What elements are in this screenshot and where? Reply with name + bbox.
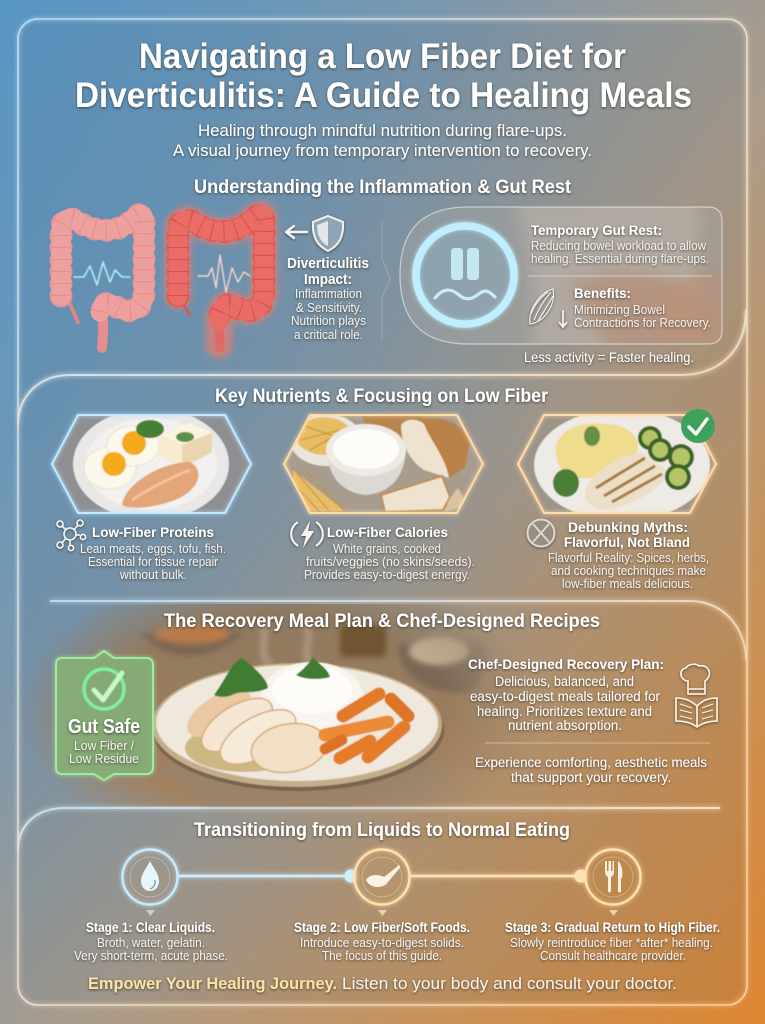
text: experience comforting: Experience comforting, aesthetic meals [475, 755, 707, 770]
copy: debunking: Debunking Myths: [568, 519, 688, 535]
text: less activity: Less activity = Faster healing. [524, 349, 694, 365]
copy: proteins: Essential for tissue repair [88, 555, 218, 569]
text: stage 3: Consult healthcare provider. [540, 949, 686, 963]
text: stage 3 [505, 919, 720, 963]
text: diverticulitis impact: Impact: [304, 272, 352, 288]
copy: proteins [80, 524, 226, 582]
panel: transitioning from liquids [74, 820, 720, 993]
text: chef-designed recovery plan: Delicious, balanced, and [495, 674, 634, 689]
copy: calories: White grains, cooked [333, 542, 441, 556]
icon: energy bolt [291, 521, 323, 548]
text: stage 2: The focus of this guide. [322, 949, 442, 963]
icon: shield [313, 216, 343, 251]
text: debunking myths [528, 519, 709, 591]
text: stage 2 [294, 919, 470, 963]
text: benefits: Minimizing Bowel [574, 303, 665, 317]
text: stage 1: Broth, water, gelatin. [97, 936, 205, 950]
text: stage 3: Slowly reintroduce fiber *after* healing. [510, 936, 713, 950]
text: stage 2: Stage 2: Low Fiber/Soft Foods. [294, 919, 470, 935]
copy: debunking: Flavorful, Not Bland [564, 534, 690, 550]
text: diverticulitis impact [287, 256, 369, 342]
text: temporary gut rest [531, 222, 709, 266]
panel: understanding inflammation and gut rest [61, 177, 722, 365]
timeline connector [178, 870, 588, 882]
text: experience comforting [475, 755, 707, 785]
text: chef-designed recovery plan: nutrient absorption. [508, 718, 622, 733]
panel: recovery meal plan [20, 604, 717, 806]
text: diverticulitis impact: Inflammation [295, 287, 362, 301]
image: low-fiber proteins [52, 408, 251, 520]
icon: fork and knife stage [586, 850, 640, 916]
text: stage 1: Very short-term, acute phase. [74, 949, 228, 963]
callout: empower your healing journey: Listen to your body and consult your doctor. [342, 974, 677, 993]
text: chef-designed recovery plan: easy-to-digest meals tailored for [470, 689, 660, 704]
icon: pause ring [416, 226, 514, 324]
icon: healthy colon [61, 214, 144, 348]
text: diverticulitis impact: & Sensitivity. [296, 301, 362, 315]
icon: chef hat and recipe book [676, 664, 717, 727]
icon: arrow pointing to colon [286, 226, 307, 238]
callout: empower your healing journey: Empower Your Healing Journey. [88, 974, 337, 993]
heading: transitioning: Transitioning from Liquids to Normal Eating [194, 820, 570, 841]
copy: calories [304, 524, 475, 582]
copy: calories: Provides easy-to-digest energy. [304, 568, 470, 582]
title: Navigating a Low Fiber Diet for [139, 37, 626, 76]
heading: recovery: The Recovery Meal Plan & Chef-Designed Recipes [164, 611, 600, 632]
icon: crossed circle [528, 520, 554, 546]
copy: calories: Low-Fiber Calories [327, 524, 448, 540]
panel: key nutrients [52, 386, 717, 591]
text: diverticulitis impact: Nutrition plays [291, 314, 366, 328]
icon: inflamed colon [178, 214, 264, 348]
callout: empower your healing journey [88, 974, 677, 993]
icon: spoon stage [354, 850, 410, 916]
heading: understanding: Understanding the Inflammation & Gut Rest [194, 177, 572, 198]
title [75, 37, 692, 115]
text: benefits: Benefits: [574, 285, 631, 301]
text: temporary gut rest: Temporary Gut Rest: [531, 222, 662, 238]
subtitle: A visual journey from temporary intervention to recovery. [173, 141, 592, 160]
text: gut safe: Gut Safe [68, 716, 140, 738]
copy: calories: fruits/veggies (no skins/seeds). [306, 555, 475, 569]
icon: muscle with down arrow [530, 289, 567, 327]
text: temporary gut rest: Reducing bowel workload to allow [531, 239, 707, 253]
text: diverticulitis impact: Diverticulitis [287, 256, 369, 272]
text: chef-designed recovery plan [468, 656, 664, 733]
copy: debunking: low-fiber meals delicious. [562, 577, 693, 591]
text: benefits [574, 285, 711, 330]
copy: debunking: and cooking techniques make [551, 564, 706, 578]
icon: water drop stage [122, 850, 178, 916]
text: low-fiber calories [291, 521, 475, 582]
text: temporary gut rest: healing. Essential during flare-ups. [531, 252, 709, 266]
icon: molecule [57, 520, 86, 551]
text: chef-designed recovery plan: healing. Prioritizes texture and [477, 704, 652, 719]
text: low-fiber proteins [57, 520, 226, 582]
subtitle [173, 121, 592, 160]
text: gut safe: Low Fiber / [74, 739, 134, 753]
copy: proteins: Lean meats, eggs, tofu, fish. [80, 542, 226, 556]
text: chef-designed recovery plan: Chef-Designed Recovery Plan: [468, 656, 664, 672]
badge: gut safe [56, 651, 153, 780]
image: low-fiber calories [284, 410, 483, 513]
text: stage 1: Stage 1: Clear Liquids. [86, 919, 215, 935]
copy: proteins: without bulk. [119, 568, 187, 582]
text: benefits: Contractions for Recovery. [574, 316, 711, 330]
plate [152, 657, 444, 791]
text: stage 2: Introduce easy-to-digest solids. [300, 936, 464, 950]
text: stage 1 [74, 919, 228, 963]
heading: key nutrients: Key Nutrients & Focusing on Low Fiber [215, 386, 549, 407]
text: experience comforting: that support your recovery. [511, 770, 671, 785]
icon: check mark [84, 669, 124, 709]
subtitle: Healing through mindful nutrition during flare-ups. [198, 121, 567, 140]
icon: green check badge [681, 409, 715, 443]
text: gut safe [68, 716, 140, 766]
divider chevron [382, 222, 390, 340]
text: diverticulitis impact: a critical role. [294, 328, 363, 342]
text: stage 3: Stage 3: Gradual Return to High Fiber. [505, 919, 720, 935]
photo: torso and hands [515, 200, 722, 350]
panel: temporary gut rest [400, 200, 722, 350]
copy: debunking [548, 519, 709, 591]
photo: chicken, rice and carrots plate [30, 604, 505, 809]
copy: debunking: Flavorful Reality: Spices, herbs, [548, 551, 709, 565]
copy: proteins: Low-Fiber Proteins [92, 524, 214, 540]
title: Diverticulitis: A Guide to Healing Meals [75, 76, 692, 115]
text: gut safe: Low Residue [69, 752, 139, 766]
image: flavorful meal [518, 409, 717, 521]
